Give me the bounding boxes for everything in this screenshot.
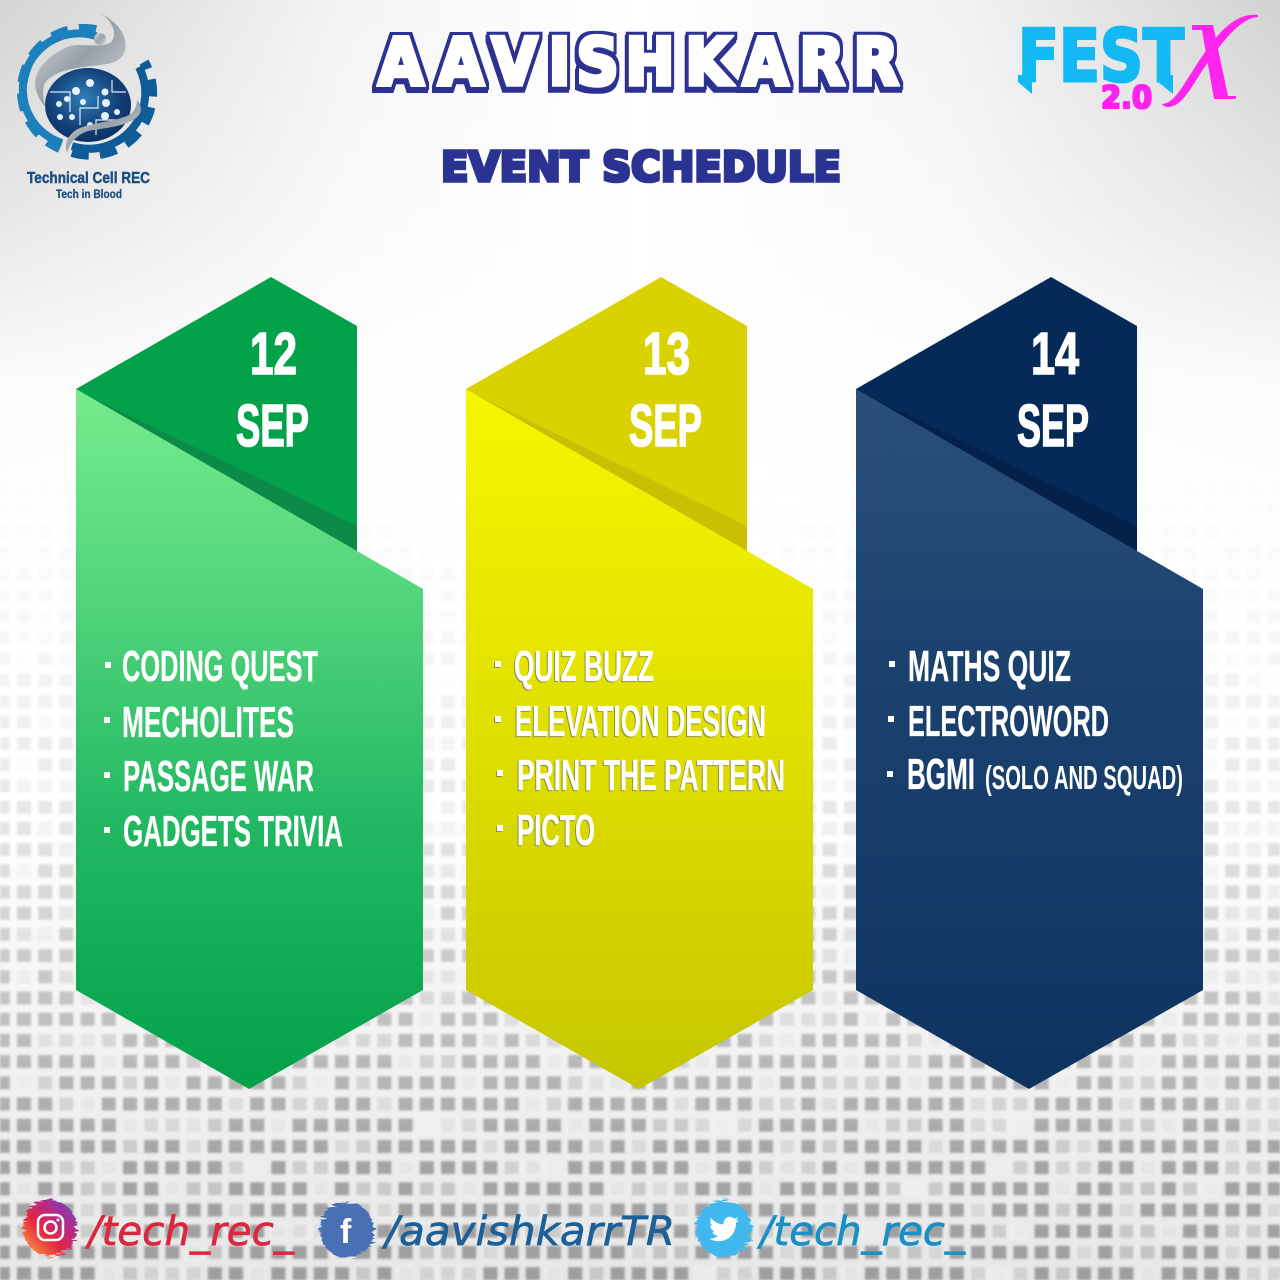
date month: SEP [629,393,702,459]
icon: facebook [320,1202,374,1258]
icon: twitter [696,1201,752,1257]
twitter handle: /tech_rec_ [757,1209,966,1255]
event list: ELECTROWORD [908,697,1109,746]
event list [495,642,785,855]
background pixel grid [0,636,1280,1280]
event list: MECHOLITES [122,698,294,747]
event list: QUIZ BUZZ [514,642,654,691]
title: AAVISHKARR: AAVISHKARR [378,24,899,100]
date month: SEP [236,393,309,459]
icon: facebook: f [340,1213,352,1251]
date tab [856,277,1137,552]
facebook handle: /aavishkarrTR [382,1209,675,1255]
panel body [76,389,423,1089]
fest wordmark: FEST [1018,14,1184,98]
instagram handle: /tech_rec_ [85,1209,295,1255]
panel: 14 Sep (navy) [856,277,1203,1089]
fest tails [1018,75,1173,94]
event list: BGMI [907,750,975,799]
event list: PASSAGE WAR [123,752,314,801]
version: 2.0 [1101,80,1152,116]
date number: 12 [250,321,297,387]
event list: ELEVATION DESIGN [515,697,766,746]
event list [104,642,343,856]
event list: MATHS QUIZ [908,642,1071,691]
date tab [76,277,357,552]
date month: SEP [1017,393,1089,459]
fold shadow [76,390,357,552]
panel: 12 Sep (green) [76,277,423,1089]
date number: 13 [643,321,690,387]
event list: CODING QUEST [122,642,318,691]
logo tagline: Tech in Blood [56,187,122,201]
icon: gear [22,29,152,155]
icon: circuit globe [45,68,131,142]
social links [23,1200,966,1258]
event list: GADGETS TRIVIA [123,807,343,856]
event list: PICTO [517,806,595,855]
subtitle: event schedule: EVENT SCHEDULE [441,143,841,191]
logo name: Technical Cell REC [27,170,150,187]
logo: Technical Cell REC [22,13,152,201]
panel body [466,389,813,1089]
logo: Fest X 2.0 [1018,14,1258,116]
event list [887,642,1183,799]
panel: 13 Sep (yellow) [466,277,813,1089]
date number: 14 [1031,321,1079,387]
icon: instagram [23,1200,77,1256]
panel body [856,389,1203,1089]
event list: PRINT THE PATTERN [517,751,785,800]
fold shadow [856,390,1137,552]
date tab [466,277,747,552]
script X [1162,15,1258,107]
icon: silver swoosh figure [35,13,141,153]
fold shadow [466,390,747,552]
